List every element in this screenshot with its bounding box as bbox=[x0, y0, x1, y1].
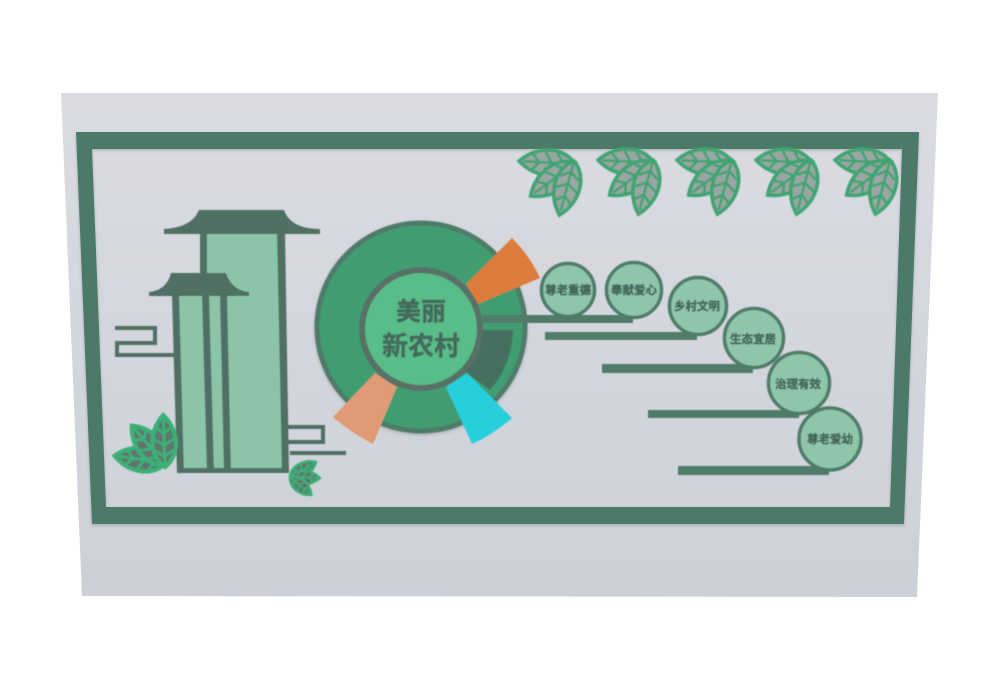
big roof bbox=[164, 210, 320, 234]
badge 1: 尊老重德 bbox=[545, 283, 591, 297]
title: 美丽 bbox=[396, 298, 446, 326]
badge 2: 奉献爱心 bbox=[611, 283, 657, 297]
leaf cluster 5 bbox=[834, 147, 902, 217]
outer disc bbox=[317, 223, 525, 431]
leaf cluster 3 bbox=[676, 147, 744, 217]
shelf 4 bbox=[648, 410, 799, 418]
tall tower panel bbox=[205, 234, 284, 470]
badge 5: 治理有效 bbox=[775, 377, 821, 391]
short tower panels bbox=[178, 296, 226, 470]
badge 4: 生态宜居 bbox=[730, 332, 776, 346]
shelf 1 bbox=[482, 315, 633, 323]
salmon wedge bbox=[333, 373, 397, 444]
stepped shelves and labels bbox=[482, 262, 861, 475]
title bbox=[382, 298, 460, 361]
orange wedge bbox=[466, 238, 540, 304]
central circle emblem bbox=[317, 223, 540, 444]
badge 3 bbox=[670, 278, 726, 334]
shelf 5 bbox=[678, 466, 829, 475]
small bottom leaves bbox=[286, 456, 320, 500]
shelf 2 bbox=[545, 332, 697, 340]
tower buildings bbox=[113, 210, 346, 500]
badge 6 bbox=[799, 408, 861, 470]
leaf cluster 4 bbox=[755, 147, 823, 217]
leaf cluster 2 bbox=[597, 147, 665, 217]
green frame bbox=[76, 132, 919, 524]
badge 4 bbox=[724, 308, 784, 368]
badge 5 bbox=[768, 352, 830, 414]
cloud scroll right bbox=[288, 427, 346, 453]
shelf 3 bbox=[602, 364, 753, 373]
badge 2 bbox=[606, 262, 662, 318]
wall panel bbox=[61, 93, 938, 597]
inner disc bbox=[362, 270, 480, 388]
cyan wedge bbox=[446, 373, 512, 444]
bottom-left leaves bbox=[113, 415, 177, 475]
dark sector bbox=[465, 330, 513, 390]
badge 6: 尊老爱幼 bbox=[807, 432, 853, 446]
small roof bbox=[149, 273, 249, 296]
tower posts bbox=[172, 232, 289, 473]
badge 1 bbox=[542, 264, 594, 316]
leaf cluster 1 bbox=[518, 148, 586, 218]
cloud scroll left bbox=[115, 328, 174, 355]
badge 3: 乡村文明 bbox=[674, 299, 720, 313]
top leaf decorations bbox=[518, 147, 902, 218]
title: 新农村 bbox=[382, 331, 460, 361]
